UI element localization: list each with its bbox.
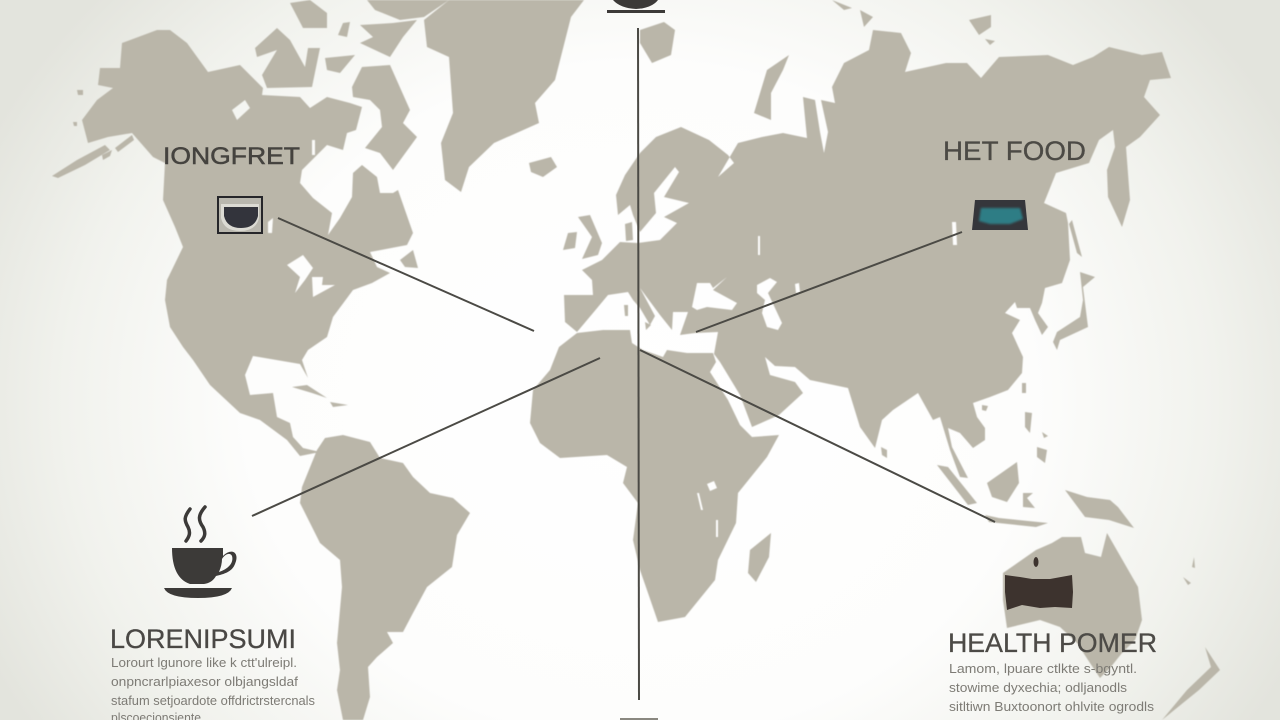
icon: teal tray — [972, 200, 1028, 230]
Eurasia — [564, 30, 1171, 478]
icon: dark block — [1005, 557, 1073, 610]
heading: top left: IONGFRET — [163, 143, 300, 170]
Southeast Asia islands — [881, 383, 1134, 528]
icon: bottom cut-off bar — [620, 718, 658, 720]
connector lines — [252, 28, 995, 700]
icon: steaming cup — [164, 507, 237, 598]
body text: bottom right: sitltiwn Buxtoonort ohlvite ogrodls — [949, 699, 1155, 714]
body text: bottom left: onpncrarlpiaxesor olbjangsldaf — [111, 674, 298, 689]
Iceland — [529, 157, 557, 177]
Arctic islands — [255, 0, 449, 268]
body text: bottom left: Lorourt lgunore like k ctt'ulreipl. — [111, 655, 297, 670]
Madagascar — [748, 533, 771, 582]
body text: bottom left: stafum setjoardote offdrictrstercnals — [111, 693, 315, 708]
Africa — [530, 330, 779, 622]
line to top-right — [696, 232, 962, 332]
New Zealand — [1162, 557, 1220, 720]
heading: bottom left: LORENIPSUMI — [110, 624, 296, 654]
heading: bottom right: HEALTH POMER — [948, 628, 1157, 658]
Greenland — [424, 0, 584, 192]
North America — [82, 30, 413, 456]
icon: framed bowl — [218, 197, 262, 233]
body text: bottom right: stowime dyxechia; odljanodls — [949, 680, 1128, 695]
line to top-left — [278, 218, 534, 331]
body text: bottom left — [111, 655, 315, 720]
Arctic Russia islands — [640, 0, 995, 120]
heading: top right: HET FOOD — [943, 136, 1086, 166]
panel: bottom left — [110, 507, 315, 720]
line to bottom-left — [252, 358, 600, 516]
Japan — [1053, 272, 1095, 350]
panel: bottom right — [948, 557, 1157, 714]
British Isles — [563, 215, 602, 259]
Caribbean islands — [292, 385, 348, 407]
icon: top cup — [607, 0, 665, 13]
Sakhalin — [1069, 220, 1082, 257]
Alaska peninsula and islands — [52, 90, 134, 178]
panel: top right — [943, 136, 1086, 230]
vertical axis — [638, 28, 639, 700]
body text: bottom right — [949, 661, 1155, 714]
body text: bottom right: Lamom, lpuare ctlkte s-bgyntl. — [949, 661, 1137, 676]
Australia — [1003, 533, 1142, 678]
line to bottom-right — [640, 350, 995, 522]
South America — [300, 435, 470, 720]
panel: top left — [163, 143, 300, 233]
Denmark and Corsica — [624, 222, 651, 330]
